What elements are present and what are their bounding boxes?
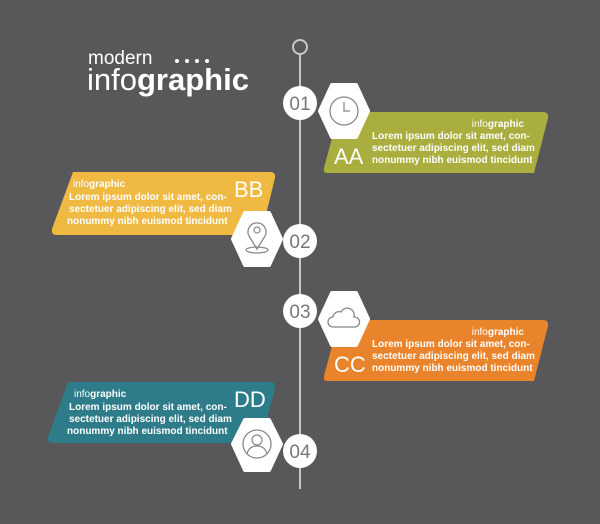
panel BB: sectetuer adipiscing elit, sed diam	[69, 204, 232, 215]
panel DD	[48, 382, 275, 443]
timeline line	[293, 40, 307, 489]
panel DD: infographic	[74, 389, 127, 400]
panel DD: Lorem ipsum dolor sit amet, con-	[69, 402, 227, 413]
panel CC: nonummy nibh euismod tincidunt	[372, 363, 533, 374]
panel DD: sectetuer adipiscing elit, sed diam	[69, 414, 232, 425]
panel AA: sectetuer adipiscing elit, sed diam	[372, 143, 535, 154]
panel AA	[324, 112, 548, 173]
panel AA: infographic	[472, 119, 524, 130]
panel CC: infographic	[472, 327, 524, 338]
panel BB: nonummy nibh euismod tincidunt	[67, 216, 228, 227]
panel CC: CC	[334, 352, 366, 377]
marker 02 with pin: 02	[289, 232, 311, 253]
marker 01 with clock	[283, 85, 368, 137]
panel BB: BB	[234, 177, 263, 202]
panel DD: DD	[234, 387, 266, 412]
panel DD: nonummy nibh euismod tincidunt	[67, 426, 228, 437]
marker 01 with clock: 01	[289, 94, 311, 115]
panel CC	[324, 320, 548, 381]
marker 02 with pin	[233, 213, 317, 265]
marker 04 with user	[233, 420, 317, 470]
panel AA: nonummy nibh euismod tincidunt	[372, 155, 533, 166]
title: infographic	[87, 62, 249, 97]
panel BB	[52, 172, 275, 235]
panel CC: Lorem ipsum dolor sit amet, con-	[372, 339, 530, 350]
panel AA: Lorem ipsum dolor sit amet, con-	[372, 131, 530, 142]
panel CC: sectetuer adipiscing elit, sed diam	[372, 351, 535, 362]
marker 03 with cloud	[283, 293, 368, 345]
panel BB: Lorem ipsum dolor sit amet, con-	[69, 192, 227, 203]
panel AA: AA	[334, 144, 364, 169]
panel BB: infographic	[73, 179, 126, 190]
title: modern	[88, 48, 152, 69]
marker 03 with cloud: 03	[289, 302, 311, 323]
marker 04 with user: 04	[289, 442, 311, 463]
